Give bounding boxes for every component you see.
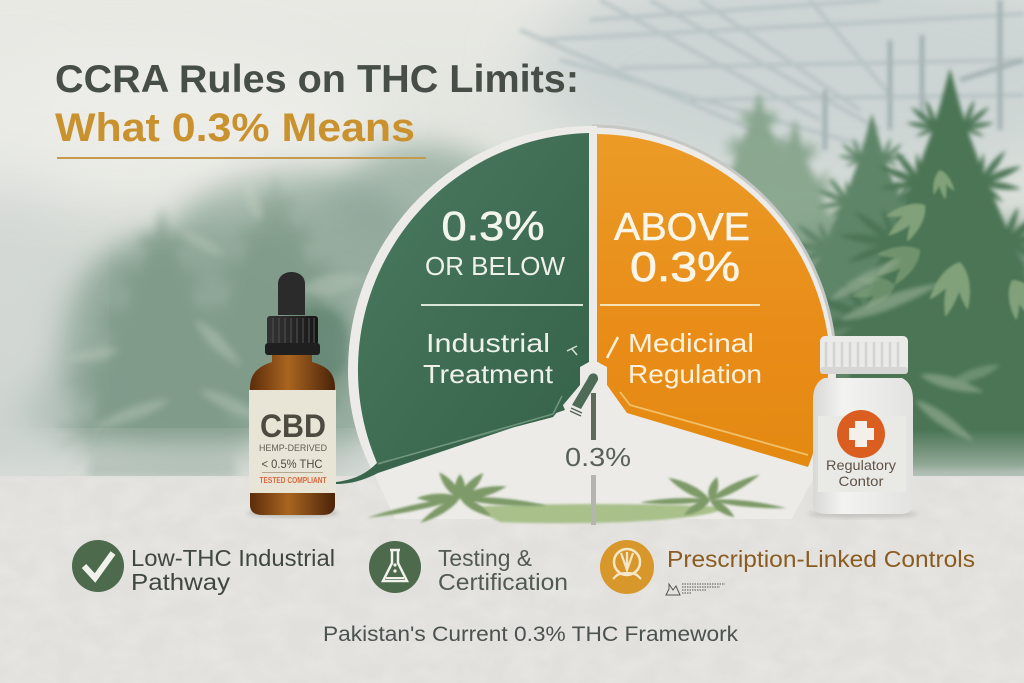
feature: low-THC industrial pathway: Low-THC Industrial: [131, 545, 335, 571]
small flask mark: [666, 584, 725, 595]
mist and floor: [0, 440, 400, 480]
panel: above 0.3% (orange wedge): ABOVE: [614, 206, 750, 249]
regulatory pill bottle: Regulatory: [826, 457, 896, 473]
icon: hemp leaf left: [367, 470, 547, 526]
panel: above 0.3% (orange wedge): Regulation: [628, 359, 762, 389]
regulatory pill bottle: Contor: [838, 473, 884, 489]
icon: check mark: [72, 540, 124, 592]
icon: gold controls emblem: [600, 540, 654, 594]
feature: low-THC industrial pathway: [72, 540, 335, 595]
bottle label: TESTED COMPLIANT: [260, 475, 327, 485]
left background plants: [20, 145, 510, 477]
threshold marker: [570, 362, 606, 525]
regulatory pill bottle: [808, 336, 918, 518]
feature: testing and certification: Certification: [438, 569, 568, 595]
right cannabis plants: [668, 68, 1024, 480]
panel: 0.3% or below (green wedge): OR BELOW: [425, 251, 565, 281]
title: What 0.3% Means: [55, 106, 415, 150]
title: [55, 58, 579, 159]
feature: testing and certification: Testing &: [438, 545, 532, 571]
CBD dropper bottle: [247, 272, 339, 517]
greenhouse roof structure: [520, 0, 1024, 190]
feature: prescription-linked controls: [600, 540, 975, 595]
feature: prescription-linked controls: Prescription-Linked Controls: [667, 546, 975, 572]
feature: low-THC industrial pathway: Pathway: [131, 569, 231, 595]
bottle label: [249, 390, 336, 493]
bottle label: < 0.5% THC: [262, 457, 323, 471]
footer caption: Pakistan's Current 0.3% THC Framework: [323, 623, 739, 646]
central semi-circular chart: [336, 126, 836, 526]
threshold label: 0.3%: [565, 442, 631, 472]
panel: above 0.3% (orange wedge): [597, 134, 829, 467]
panel: 0.3% or below (green wedge): Treatment: [423, 359, 554, 389]
chart backing disc: [348, 126, 836, 519]
panel: 0.3% or below (green wedge): [336, 133, 589, 484]
title: CCRA Rules on THC Limits:: [55, 58, 579, 101]
green band at base: [470, 504, 725, 523]
highlighted foliage: [846, 166, 1024, 332]
bottle label: CBD: [260, 408, 326, 444]
center divider: [589, 126, 597, 366]
panel: above 0.3% (orange wedge): Medicinal: [628, 328, 754, 358]
icon: hemp leaf right: [640, 471, 787, 520]
icon: medical cross: [837, 410, 885, 458]
panel: above 0.3% (orange wedge): 0.3%: [630, 243, 740, 290]
icon: flask: [369, 541, 421, 593]
panel: 0.3% or below (green wedge): Industrial: [426, 328, 550, 358]
feature: testing and certification: [369, 541, 568, 595]
panel: 0.3% or below (green wedge): 0.3%: [442, 203, 544, 249]
bottle label: HEMP-DERIVED: [259, 443, 327, 454]
